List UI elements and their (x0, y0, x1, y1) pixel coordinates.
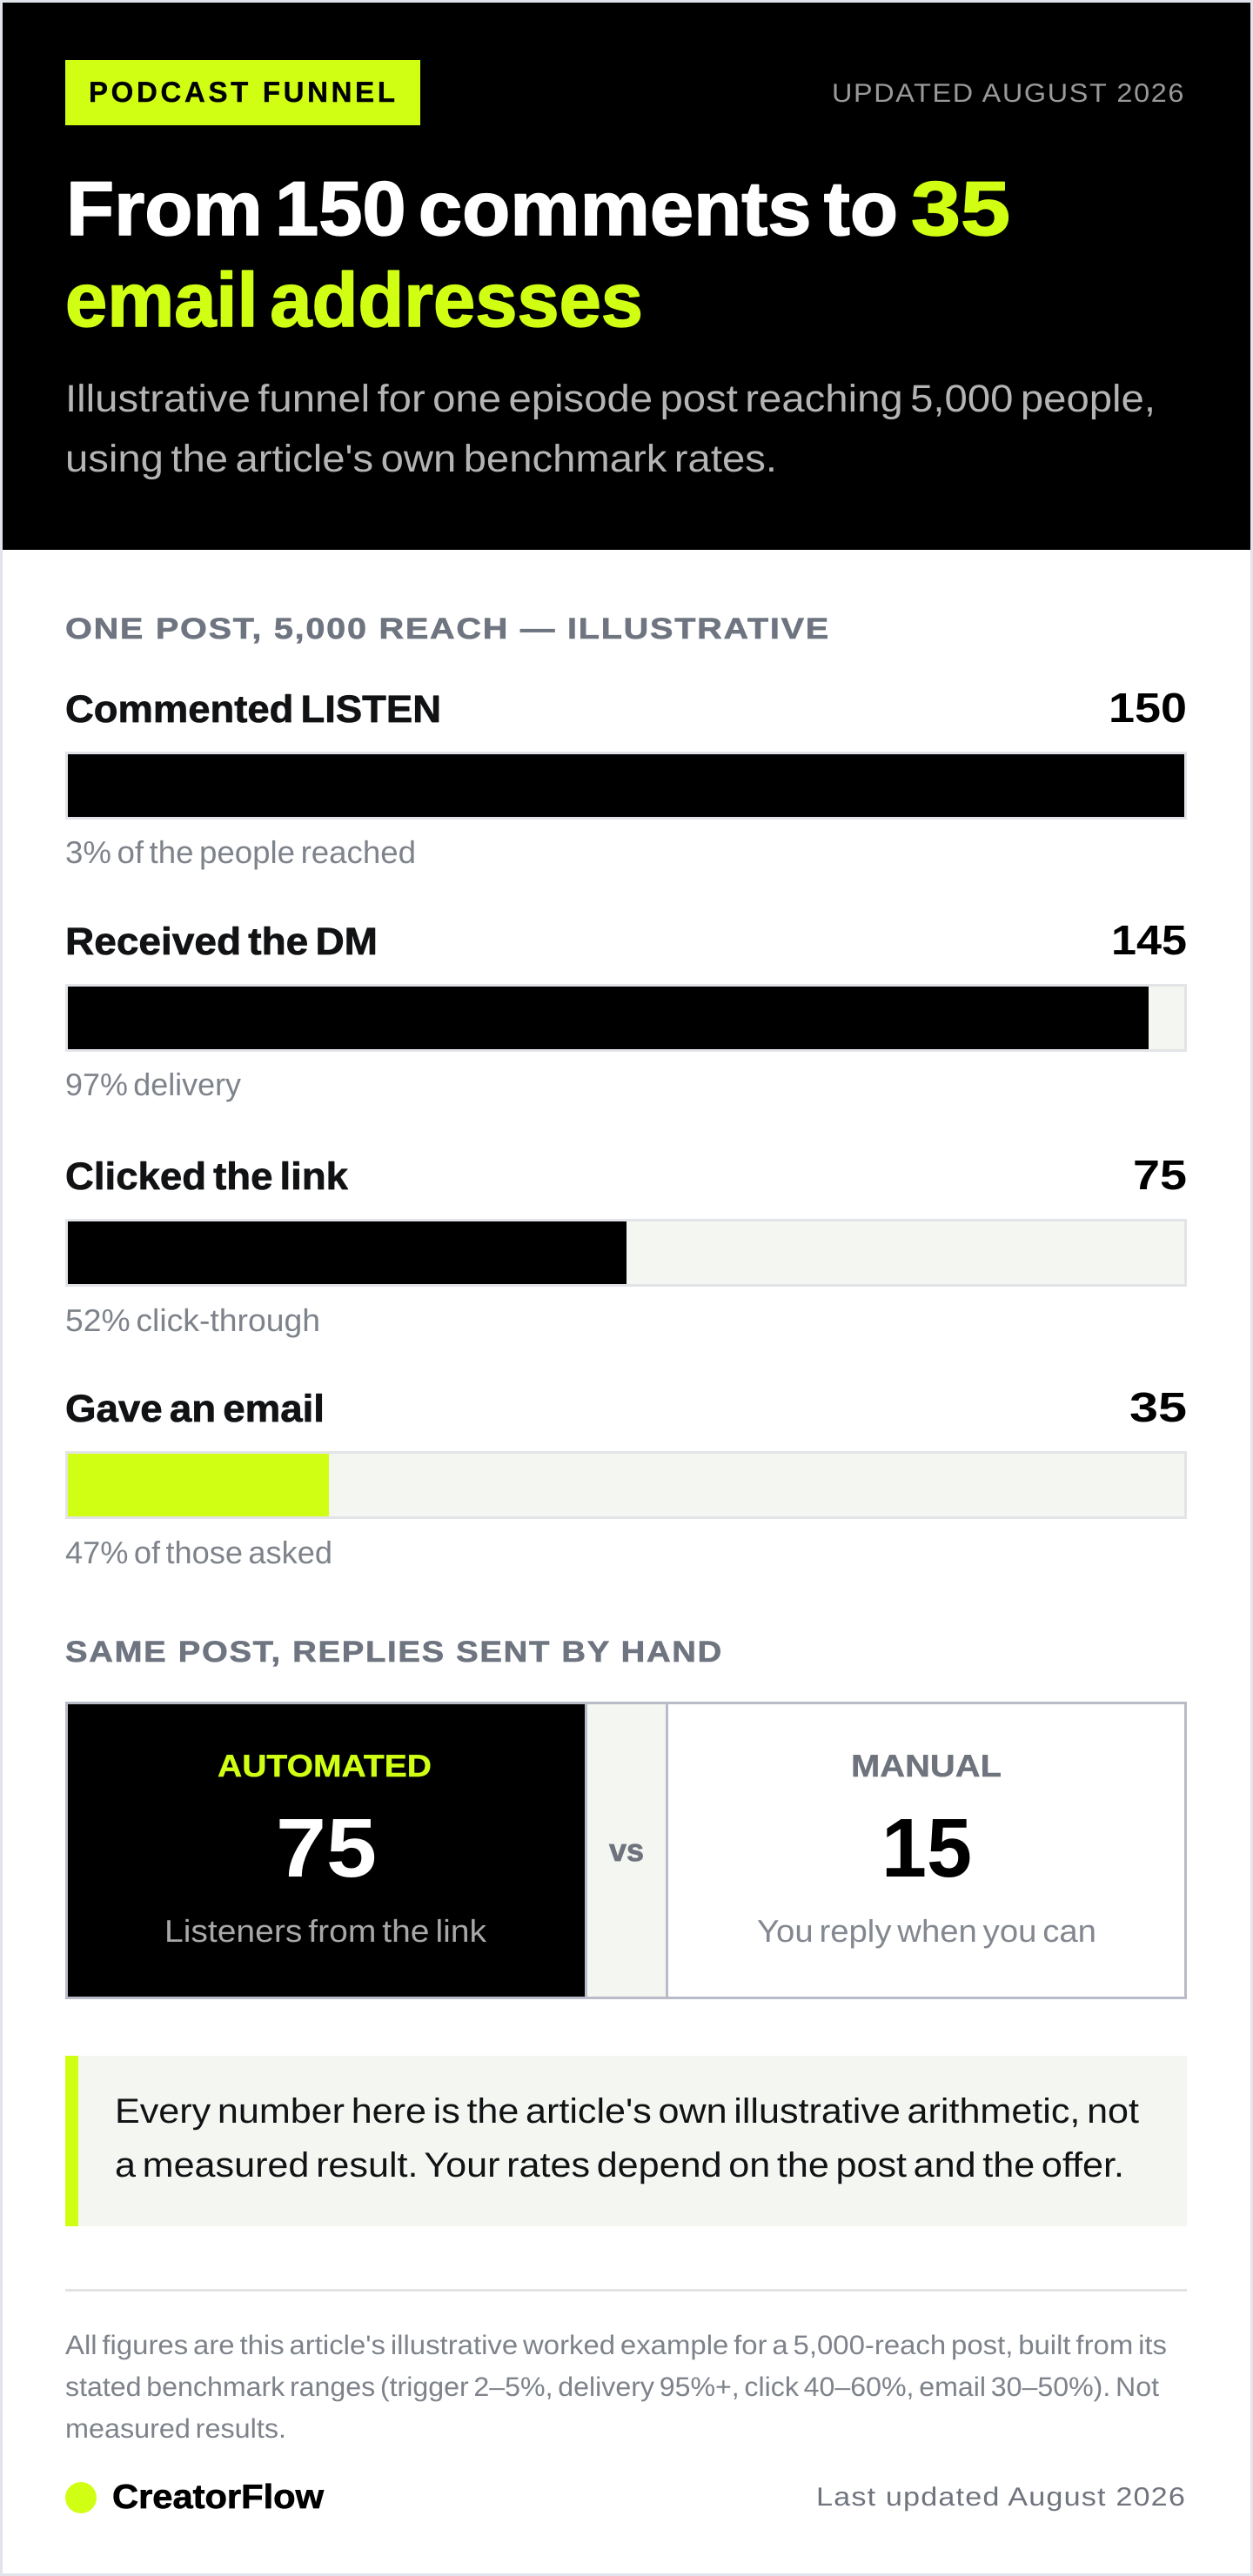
funnel row: received: 145 (1111, 918, 1187, 964)
card: manual: 15 (881, 1802, 972, 1895)
funnel row: email (65, 1385, 1187, 1570)
card: manual (668, 1704, 1184, 1997)
card: automated: Listeners from the link (164, 1913, 487, 1949)
card: automated: 75 (276, 1802, 377, 1895)
footnote: All figures are this article's illustrative worked example for a 5,000-reach post, built from its (65, 2330, 1167, 2360)
title (65, 165, 1010, 343)
brand: CreatorFlow: CreatorFlow (112, 2479, 325, 2516)
funnel row: email: 47% of those asked (65, 1535, 332, 1570)
label: vs: vs (609, 1832, 644, 1868)
funnel row: clicked: 75 (1133, 1153, 1187, 1199)
label: vs (587, 1704, 666, 1997)
date: updated: UPDATED AUGUST 2026 (832, 79, 1185, 108)
footnote: measured results. (65, 2413, 286, 2444)
funnel row: clicked (65, 1153, 1187, 1338)
funnel row: clicked: Clicked the link (65, 1155, 349, 1198)
footnote: stated benchmark ranges (trigger 2–5%, delivery 95%+, click 40–60%, email 30–50%). Not (65, 2372, 1159, 2402)
funnel row: commented: 3% of the people reached (65, 834, 416, 870)
card: manual: MANUAL (851, 1748, 1002, 1783)
subtitle (65, 378, 1156, 480)
footnote (65, 2330, 1167, 2444)
title: 35 (911, 165, 1010, 251)
title: email addresses (65, 257, 643, 343)
funnel row: commented: Commented LISTEN (65, 688, 441, 731)
funnel row: received (65, 918, 1187, 1102)
icon: brand dot (65, 2482, 97, 2513)
subtitle: using the article's own benchmark rates. (65, 438, 777, 480)
funnel row: email: Gave an email (65, 1388, 325, 1430)
panel: header (3, 3, 1250, 550)
subtitle: Illustrative funnel for one episode post reaching 5,000 people, (65, 378, 1156, 420)
funnel row: received: 97% delivery (65, 1067, 241, 1102)
callout (65, 2056, 1187, 2226)
funnel row: commented: 150 (1109, 686, 1187, 732)
card: automated: AUTOMATED (218, 1748, 432, 1783)
funnel row: email: 35 (1129, 1385, 1187, 1431)
card: automated (68, 1704, 585, 1997)
card: manual: You reply when you can (757, 1913, 1096, 1949)
tag: podcast funnel (65, 60, 420, 125)
tag: podcast funnel: PODCAST FUNNEL (89, 76, 395, 108)
callout: a measured result. Your rates depend on the post and the offer. (115, 2146, 1124, 2185)
panel: automated vs manual (65, 1702, 1187, 1999)
funnel row: clicked: 52% click-through (65, 1302, 320, 1338)
callout: Every number here is the article's own illustrative arithmetic, not (115, 2092, 1139, 2131)
title: From 150 comments to (66, 165, 898, 251)
heading: funnel section: ONE POST, 5,000 REACH — ILLUSTRATIVE (65, 612, 830, 646)
heading: comparison section: SAME POST, REPLIES SENT BY HAND (65, 1636, 723, 1669)
funnel row: received: Received the DM (65, 920, 378, 963)
footer date: Last updated August 2026 (816, 2483, 1186, 2512)
funnel row: commented (65, 686, 1187, 870)
panel: funnel chart (65, 686, 1187, 1570)
